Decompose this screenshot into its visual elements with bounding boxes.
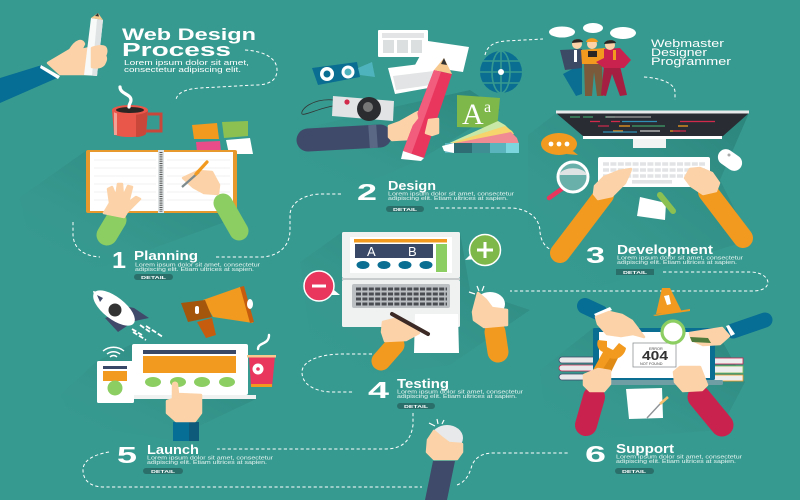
- step 6 label: Lorem ipsum dolor sit amet, consectetur: [616, 454, 742, 460]
- icon: colour swatch fan: [442, 121, 519, 153]
- step 1 label: [112, 247, 260, 280]
- step 6 label: DETAIL: [622, 469, 646, 474]
- step 2 label: [357, 179, 514, 212]
- step 5 label: Lorem ipsum dolor sit amet, consectetur: [147, 456, 273, 462]
- icon: wireframe cards: [378, 30, 469, 94]
- step 2 label: Lorem ipsum dolor sit amet, consectetur: [388, 192, 514, 198]
- step 4 label: Lorem ipsum dolor sit amet, consectetur: [397, 390, 523, 396]
- icon: top-left hand pointing: [585, 306, 644, 337]
- team roles: Programmer: [651, 56, 732, 68]
- panel: support: [559, 288, 765, 474]
- icon: laptop A/B test: B: [408, 244, 417, 259]
- icon: laptop error 404: 404: [642, 349, 668, 363]
- icon: magnifier: [549, 162, 588, 198]
- icon: wrench and hand: [584, 340, 626, 425]
- icon: team of three: [549, 23, 636, 96]
- step 2 label: adipiscing elit. Etiam ultrices at sapien.: [388, 196, 508, 202]
- icon: typing hands and arms: [560, 168, 743, 253]
- icon: paper and marker: [637, 195, 673, 220]
- step 5 label: 5: [117, 442, 137, 468]
- icon: open notebook: [86, 150, 237, 213]
- step 3 label: [586, 242, 743, 275]
- panel: design: [302, 30, 522, 212]
- icon: globe: [480, 51, 522, 93]
- icon: laptop A/B test: [342, 232, 460, 327]
- icon: minus bubble: [304, 271, 340, 301]
- icon: typography card: A: [462, 98, 484, 131]
- icon: laptop error 404: [593, 328, 723, 385]
- icon: pointing hand: [167, 383, 201, 441]
- icon: writing hand: [381, 314, 428, 361]
- icon: wifi: [103, 347, 124, 357]
- panel: testing: [304, 232, 523, 500]
- step 3 label: 3: [586, 242, 605, 268]
- icon: mouse hand: [469, 286, 507, 352]
- step 5 label: Launch: [147, 443, 199, 457]
- icon: typography card: [457, 95, 500, 131]
- step 2 label: DETAIL: [393, 207, 417, 212]
- step 4 label: adipiscing elit. Etiam ultrices at sapien.: [397, 394, 517, 400]
- icon: speech bubble: [541, 133, 578, 155]
- icon: paper: [414, 314, 459, 353]
- icon: hand on mouse: [425, 419, 463, 500]
- icon: hand holding pencil: [0, 13, 106, 103]
- icon: mouse: [715, 146, 745, 174]
- panel: planning: [86, 87, 260, 280]
- icon: magnifier held by right hand: [662, 320, 765, 345]
- step 2 label: 2: [357, 179, 377, 205]
- icon: phone: [97, 361, 134, 403]
- step 5 label: DETAIL: [151, 469, 175, 474]
- icon: video camera: [312, 62, 375, 85]
- step 1 label: 1: [112, 247, 126, 273]
- step 3 label: adipiscing elit. Etiam ultrices at sapien.: [617, 260, 737, 266]
- icon: paper and pen: [626, 388, 668, 419]
- icon: traffic cone: [653, 288, 690, 316]
- panel: launch: [88, 284, 276, 474]
- step 6 label: Support: [616, 442, 675, 456]
- icon: books: [559, 357, 743, 381]
- icon: plus bubble: [465, 234, 500, 266]
- title: Process: [122, 39, 231, 60]
- team roles: Webmaster: [651, 38, 725, 50]
- step 1 label: Lorem ipsum dolor sit amet, consectetur: [135, 262, 260, 268]
- icon: coffee mug: [112, 87, 161, 137]
- icon: typography card: a: [484, 99, 491, 116]
- icon: tablet screen: [132, 344, 256, 399]
- icon: rocket: [88, 284, 163, 340]
- step 5 label: adipiscing elit. Etiam ultrices at sapien.: [147, 460, 267, 466]
- icon: hand with pencil: [308, 58, 452, 161]
- step 3 label: Lorem ipsum dolor sit amet, consectetur: [617, 256, 743, 262]
- long shadows: [20, 90, 750, 440]
- step 4 label: 4: [368, 377, 389, 403]
- icon: sticky notes: [192, 121, 253, 154]
- step 4 label: [368, 377, 523, 409]
- icon: megaphone: [181, 286, 254, 338]
- step 3 label: DETAIL: [623, 270, 647, 275]
- team roles: Designer: [651, 47, 708, 59]
- team roles: [651, 38, 732, 68]
- step 1 label: adipiscing elit. Etiam ultrices at sapien.: [135, 267, 254, 273]
- step 6 label: 6: [585, 441, 606, 467]
- step 4 label: Testing: [397, 377, 449, 391]
- icon: left hand on notebook: [104, 184, 140, 235]
- icon: laptop A/B test: A: [367, 244, 376, 259]
- step 4 label: DETAIL: [404, 404, 428, 409]
- dashed connectors: [73, 39, 768, 487]
- panel: team and development: [541, 23, 749, 275]
- step 5 label: [117, 442, 273, 474]
- subtitle: [124, 58, 249, 74]
- icon: laptop error 404: ERROR: [649, 347, 663, 351]
- subtitle: consectetur adipiscing elit.: [124, 65, 241, 74]
- icon: laptop error 404: NOT FOUND: [640, 362, 663, 366]
- icon: keyboard: [598, 157, 710, 187]
- step 6 label: [585, 441, 742, 474]
- step 3 label: Development: [617, 243, 714, 257]
- icon: takeaway cup: [247, 335, 276, 387]
- icon: bottom-right hand and arm: [674, 367, 722, 425]
- icon: right hand writing: [182, 162, 239, 231]
- step 2 label: Design: [388, 179, 436, 193]
- title: [122, 25, 256, 60]
- title block: [0, 13, 256, 103]
- step 1 label: Planning: [134, 249, 198, 263]
- step 6 label: adipiscing elit. Etiam ultrices at sapien.: [616, 459, 736, 465]
- icon: photo camera: [302, 96, 394, 121]
- title: Web Design: [122, 25, 256, 44]
- step 1 label: DETAIL: [141, 275, 166, 280]
- subtitle: Lorem ipsum dolor sit amet,: [124, 58, 249, 67]
- icon: monitor with code: [556, 110, 749, 148]
